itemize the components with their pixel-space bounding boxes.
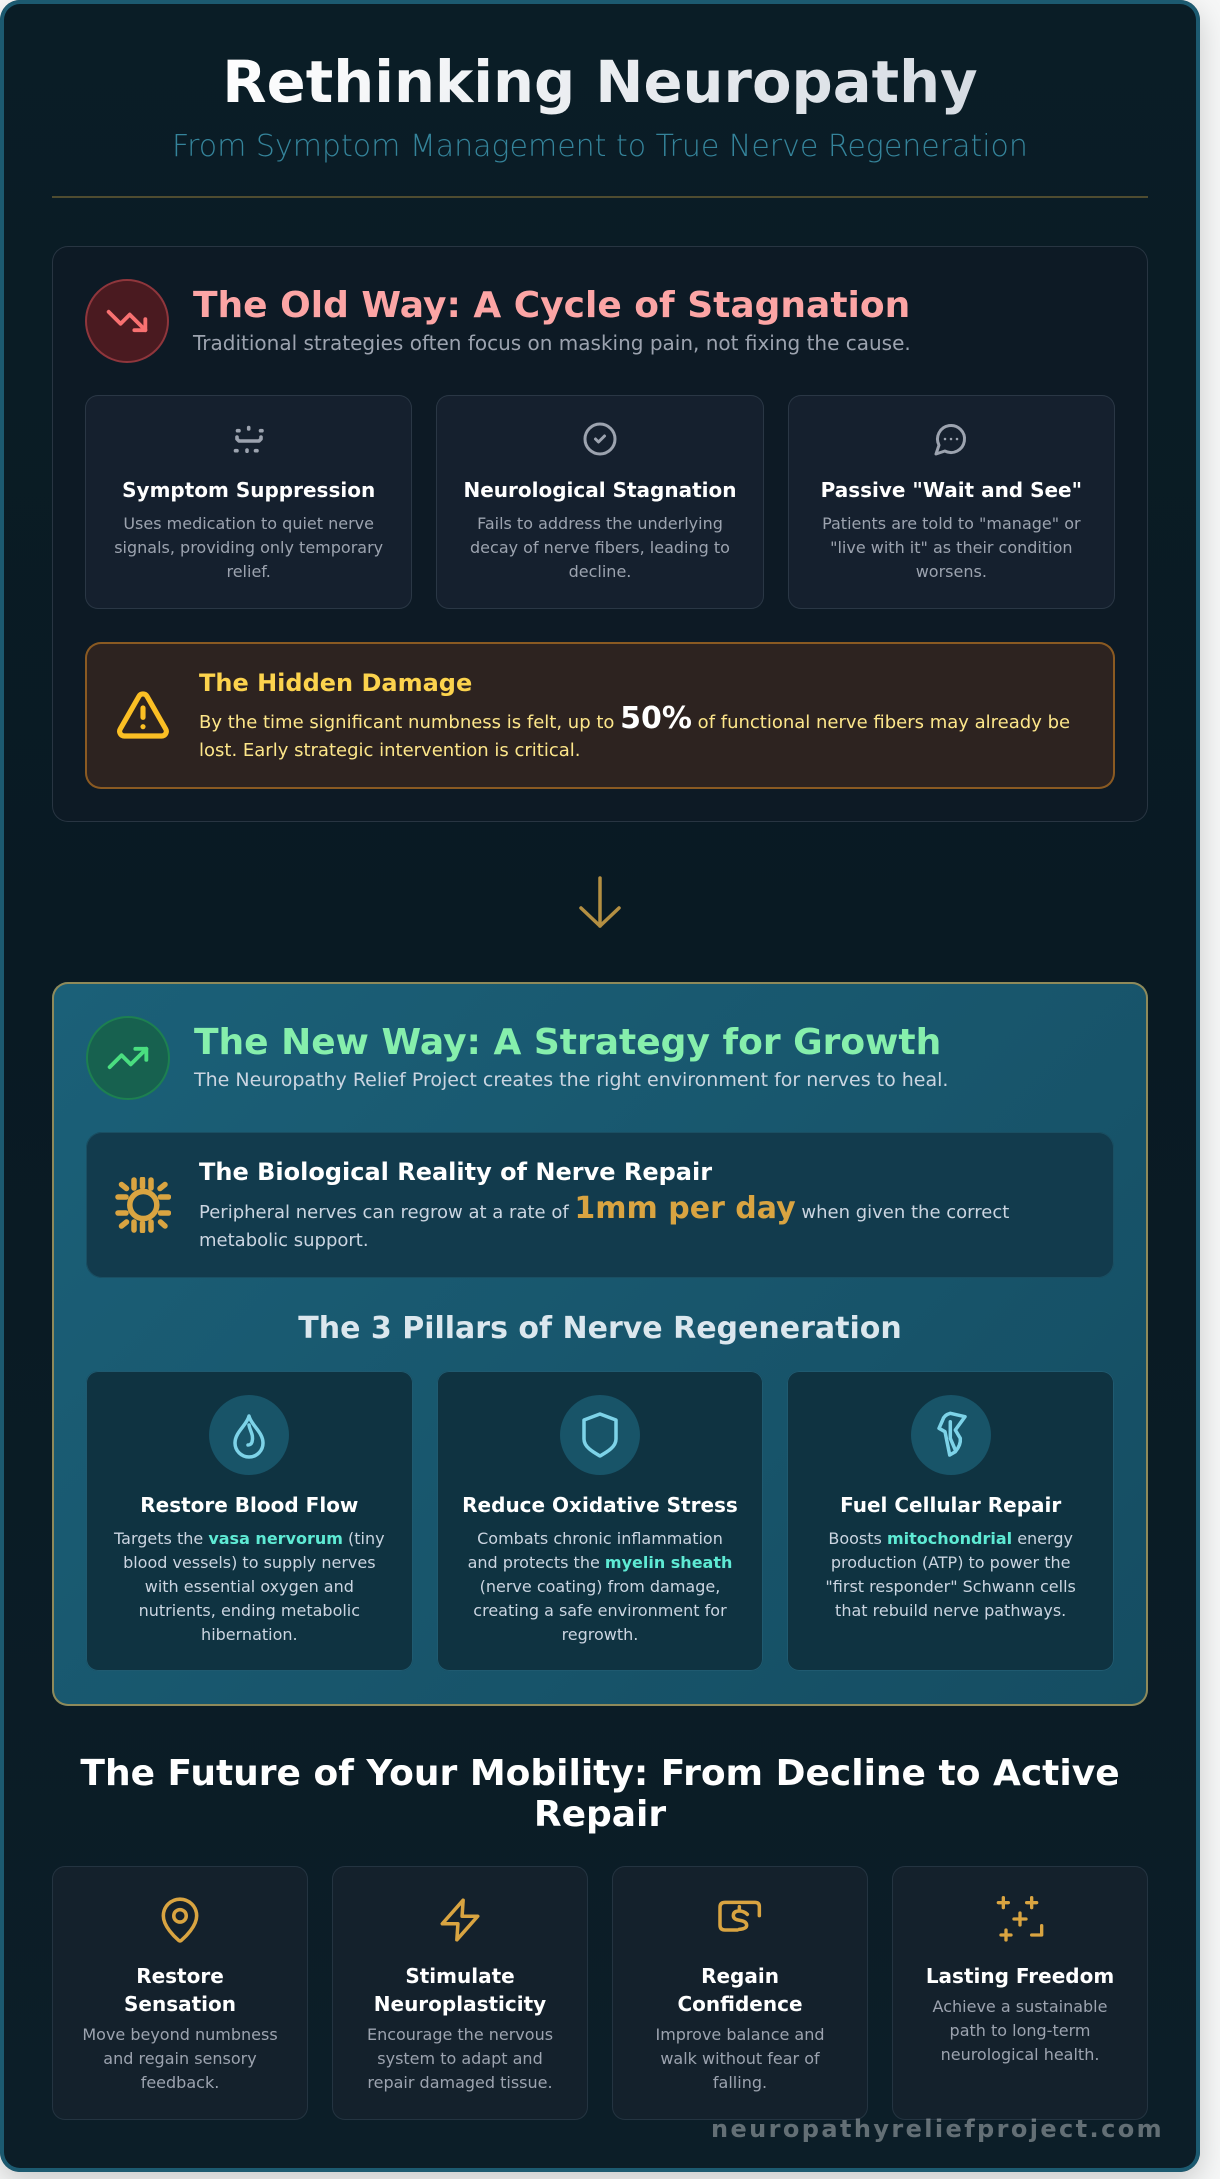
heading: new way: The New Way: A Strategy for Growth bbox=[194, 1022, 941, 1062]
title: Rethinking Neuropathy bbox=[222, 49, 978, 116]
card text: and regain sensory bbox=[103, 2048, 257, 2068]
card text: Combats chronic inflammation bbox=[477, 1528, 723, 1548]
old way subheading: Traditional strategies often focus on masking pain, not fixing the cause. bbox=[193, 331, 911, 355]
card: regain confidence bbox=[612, 1866, 868, 2120]
icon: drop bbox=[209, 1395, 289, 1475]
callout title: The Hidden Damage bbox=[199, 668, 472, 696]
card text bbox=[114, 514, 383, 580]
card text: decline. bbox=[569, 562, 631, 580]
callout text: lost. Early strategic intervention is critical. bbox=[199, 740, 580, 760]
callout text bbox=[199, 1191, 1009, 1251]
heading: future of mobility bbox=[80, 1753, 1120, 1834]
card text: and protects the myelin sheath bbox=[468, 1552, 732, 1572]
card text: walk without fear of bbox=[660, 2048, 820, 2068]
icon: check circle bbox=[584, 422, 616, 456]
card text: Fails to address the underlying bbox=[477, 514, 723, 532]
card text bbox=[114, 1528, 385, 1644]
card title: Symptom Suppression bbox=[122, 478, 375, 502]
card text: falling. bbox=[713, 2072, 767, 2092]
card text: with essential oxygen and bbox=[145, 1576, 354, 1596]
callout: the hidden damage bbox=[85, 642, 1115, 788]
card text: that rebuild nerve pathways. bbox=[835, 1600, 1066, 1620]
card text: regrowth. bbox=[562, 1624, 638, 1644]
card text bbox=[825, 1528, 1076, 1620]
subtitle: From Symptom Management to True Nerve Regeneration bbox=[172, 129, 1028, 164]
card text: creating a safe environment for bbox=[473, 1600, 727, 1620]
card text: repair damaged tissue. bbox=[367, 2072, 553, 2092]
card: symptom suppression bbox=[85, 395, 412, 609]
card text: "live with it" as their condition bbox=[830, 538, 1073, 556]
card text: system to adapt and bbox=[377, 2048, 543, 2068]
card text: Encourage the nervous bbox=[367, 2024, 553, 2044]
icon: symptom suppression bbox=[234, 426, 264, 453]
card: stimulate neuroplasticity bbox=[332, 1866, 588, 2120]
icon: speech bubble bbox=[934, 424, 966, 456]
card text: Achieve a sustainable bbox=[933, 1996, 1107, 2016]
card text: nutrients, ending metabolic bbox=[139, 1600, 360, 1620]
card text: decay of nerve fibers, leading to bbox=[470, 538, 730, 556]
card title: Fuel Cellular Repair bbox=[840, 1493, 1061, 1517]
card text: hibernation. bbox=[201, 1624, 298, 1644]
callout text: By the time significant numbness is felt, up to 50% of functional nerve fibers may already be bbox=[199, 700, 1070, 736]
heading: future of mobility: Repair bbox=[534, 1794, 666, 1834]
card title bbox=[124, 1964, 236, 2016]
card text bbox=[367, 2024, 553, 2092]
card text: Move beyond numbness bbox=[82, 2024, 278, 2044]
heading: three pillars: The 3 Pillars of Nerve Regeneration bbox=[298, 1310, 902, 1346]
card: restore sensation bbox=[52, 1866, 308, 2120]
panel: the new way bbox=[52, 982, 1148, 1706]
icon: trending up bbox=[86, 1016, 170, 1100]
icon: lightning bolt bbox=[440, 1898, 480, 1942]
card text bbox=[822, 514, 1081, 580]
card title: Passive "Wait and See" bbox=[821, 478, 1082, 502]
heading: future of mobility: The Future of Your Mobility: From Decline to Active bbox=[80, 1753, 1120, 1794]
card text bbox=[82, 2024, 278, 2092]
card text bbox=[932, 1996, 1107, 2064]
card: neurological stagnation bbox=[436, 395, 764, 609]
arrow: old to new bbox=[579, 876, 621, 928]
card title: Sensation bbox=[124, 1992, 236, 2016]
callout text bbox=[199, 700, 1070, 760]
callout title: The Biological Reality of Nerve Repair bbox=[199, 1158, 712, 1186]
card title: Reduce Oxidative Stress bbox=[462, 1493, 738, 1517]
card text: signals, providing only temporary bbox=[114, 538, 383, 556]
card title: Restore bbox=[136, 1964, 224, 1988]
card title: Lasting Freedom bbox=[926, 1964, 1114, 1988]
card text: Uses medication to quiet nerve bbox=[123, 514, 374, 532]
card text: production (ATP) to power the bbox=[831, 1552, 1070, 1572]
card text: Improve balance and bbox=[655, 2024, 825, 2044]
icon: shield bbox=[560, 1395, 640, 1475]
panel: the old way bbox=[52, 246, 1148, 822]
card title: Restore Blood Flow bbox=[140, 1493, 358, 1517]
heading: old way: The Old Way: A Cycle of Stagnation bbox=[193, 285, 910, 326]
card text: Boosts mitochondrial energy bbox=[828, 1528, 1073, 1548]
callout text: metabolic support. bbox=[199, 1230, 369, 1251]
icon: sun bbox=[115, 1177, 171, 1233]
card text: worsens. bbox=[916, 562, 987, 580]
card title bbox=[374, 1964, 546, 2016]
watermark: neuropathyreliefproject.com bbox=[711, 2114, 1164, 2142]
card text bbox=[468, 1528, 732, 1644]
card title bbox=[677, 1964, 803, 2016]
card title: Neurological Stagnation bbox=[463, 478, 736, 502]
card text bbox=[470, 514, 730, 580]
card title: Neuroplasticity bbox=[374, 1992, 546, 2016]
card text: "first responder" Schwann cells bbox=[825, 1576, 1076, 1596]
new way subheading: The Neuropathy Relief Project creates the right environment for nerves to heal. bbox=[194, 1069, 948, 1091]
card text bbox=[655, 2024, 825, 2092]
icon: dollar box bbox=[718, 1900, 762, 1932]
card title: Stimulate bbox=[405, 1964, 515, 1988]
card: fuel cellular repair bbox=[787, 1371, 1114, 1671]
icon: map pin bbox=[162, 1897, 198, 1943]
card text: feedback. bbox=[141, 2072, 219, 2092]
card title: Confidence bbox=[677, 1992, 803, 2016]
card text: (nerve coating) from damage, bbox=[480, 1576, 720, 1596]
icon: warning triangle bbox=[117, 691, 169, 739]
card text: blood vessels) to supply nerves bbox=[123, 1552, 376, 1572]
callout text: Peripheral nerves can regrow at a rate of 1mm per day when given the correct bbox=[199, 1191, 1009, 1226]
card: reduce oxidative stress bbox=[437, 1371, 763, 1671]
card title: Regain bbox=[701, 1964, 779, 1988]
card: passive wait and see bbox=[788, 395, 1115, 609]
card text: Patients are told to "manage" or bbox=[822, 514, 1081, 532]
icon: sparkles bbox=[996, 1896, 1044, 1942]
card text: path to long-term bbox=[950, 2020, 1090, 2040]
callout: biological reality bbox=[86, 1132, 1114, 1278]
icon: trending down bbox=[85, 279, 169, 363]
card: restore blood flow bbox=[86, 1371, 413, 1671]
card: lasting freedom bbox=[892, 1866, 1148, 2120]
card text: neurological health. bbox=[941, 2044, 1099, 2064]
card text: relief. bbox=[226, 562, 271, 580]
icon: nerve leaf bbox=[911, 1395, 991, 1475]
card text: Targets the vasa nervorum (tiny bbox=[114, 1528, 385, 1548]
